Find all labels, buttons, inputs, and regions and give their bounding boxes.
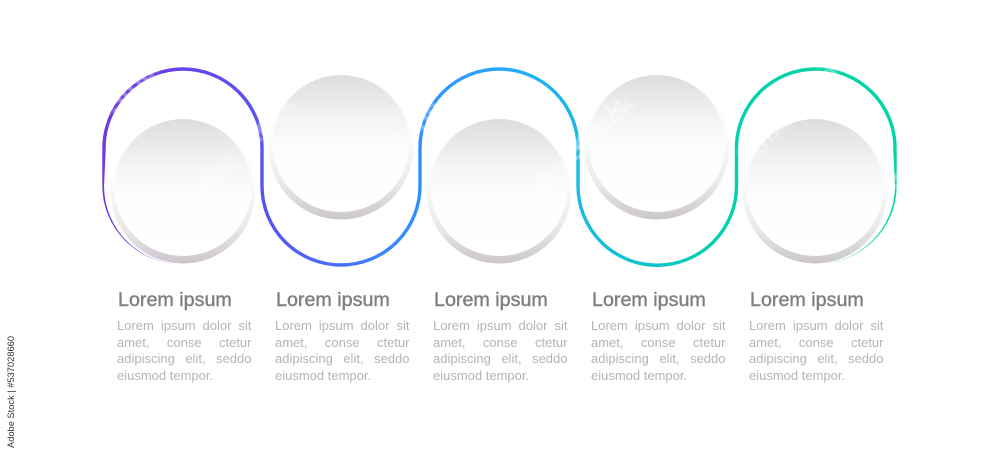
body 4: eiusmod tempor. bbox=[591, 368, 687, 383]
body 3: Lorem ipsum dolor sit bbox=[433, 318, 568, 333]
body 2: eiusmod tempor. bbox=[275, 368, 371, 383]
body 1: eiusmod tempor. bbox=[117, 368, 213, 383]
stock watermarks: Adobe bbox=[828, 164, 909, 244]
body 4: adipiscing elit, seddo bbox=[591, 351, 726, 366]
stock watermarks: Adobe Stock bbox=[728, 36, 867, 174]
heading 1: Lorem ipsum bbox=[118, 289, 232, 311]
circle 4 bbox=[584, 74, 730, 220]
circle 3 bbox=[426, 118, 572, 264]
body 3: adipiscing elit, seddo bbox=[433, 351, 568, 366]
stock watermarks: Adobe bbox=[368, 94, 449, 174]
body 1: adipiscing elit, seddo bbox=[117, 351, 252, 366]
stock watermarks: Stock bbox=[568, 88, 642, 162]
body 5: eiusmod tempor. bbox=[749, 368, 845, 383]
body 1: amet, conse ctetur bbox=[117, 335, 252, 350]
body 4 bbox=[591, 318, 726, 383]
stock watermarks: Adobe Stock bbox=[493, 94, 632, 232]
heading 5: Lorem ipsum bbox=[750, 289, 864, 311]
column 2 text bbox=[275, 289, 410, 383]
body 1: Lorem ipsum dolor sit bbox=[117, 318, 252, 333]
body 2: Lorem ipsum dolor sit bbox=[275, 318, 410, 333]
column 1 text bbox=[117, 289, 252, 383]
body 1 bbox=[117, 318, 252, 383]
circle 1 bbox=[110, 118, 256, 264]
body 3 bbox=[433, 318, 568, 383]
circle 5 bbox=[742, 118, 888, 264]
column 4 text bbox=[591, 289, 726, 383]
serpentine gradient line bbox=[102, 69, 897, 265]
heading 3: Lorem ipsum bbox=[434, 289, 548, 311]
body 3: amet, conse ctetur bbox=[433, 335, 568, 350]
body 4: amet, conse ctetur bbox=[591, 335, 726, 350]
body 5 bbox=[749, 318, 884, 383]
vertical stock id label: Adobe Stock | #537028660 bbox=[6, 336, 16, 448]
body 2: amet, conse ctetur bbox=[275, 335, 410, 350]
stock watermarks bbox=[33, 36, 909, 244]
body 2: adipiscing elit, seddo bbox=[275, 351, 410, 366]
circle 2 bbox=[268, 74, 414, 220]
body 5: adipiscing elit, seddo bbox=[749, 351, 884, 366]
stock watermarks: Adobe Stock bbox=[163, 88, 302, 226]
body 5: amet, conse ctetur bbox=[749, 335, 884, 350]
body 2 bbox=[275, 318, 410, 383]
body 4: Lorem ipsum dolor sit bbox=[591, 318, 726, 333]
column 5 text bbox=[749, 289, 884, 383]
body 3: eiusmod tempor. bbox=[433, 368, 529, 383]
body 5: Lorem ipsum dolor sit bbox=[749, 318, 884, 333]
heading 4: Lorem ipsum bbox=[592, 289, 706, 311]
column 3 text bbox=[433, 289, 568, 383]
stock watermarks: Adobe Stock bbox=[33, 46, 172, 184]
heading 2: Lorem ipsum bbox=[276, 289, 390, 311]
